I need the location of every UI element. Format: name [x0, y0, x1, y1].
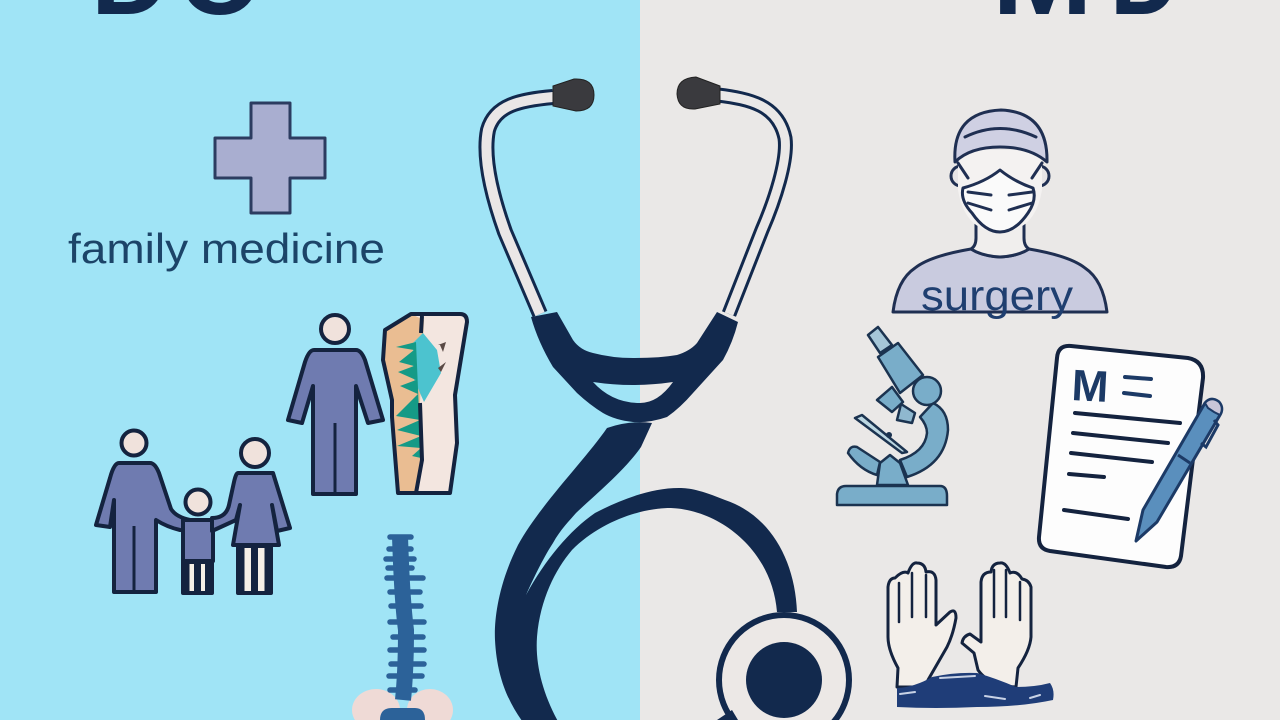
left binaural tube [486, 97, 553, 314]
label: surgery: surgery [921, 272, 1074, 320]
icon: microscope [837, 327, 948, 505]
shirt [893, 249, 1107, 312]
icon: stethoscope [486, 77, 849, 720]
icon: medical document with pen [1039, 346, 1222, 567]
heading: MD [992, 0, 1179, 38]
right glove [962, 563, 1031, 687]
face [958, 150, 1042, 232]
icon: gloved hands [888, 563, 1054, 708]
document header: M [1070, 361, 1110, 412]
panel: MD background [640, 0, 1280, 720]
left ear tip [553, 79, 594, 111]
mother [212, 439, 290, 593]
ears [951, 166, 971, 186]
icon: spine anatomy body [383, 314, 467, 493]
right binaural tube [718, 95, 785, 314]
icon: surgeon [893, 110, 1107, 312]
mask [962, 170, 1034, 232]
chest tube and arch [495, 422, 797, 720]
icon: family group [96, 430, 290, 593]
pen [1136, 399, 1222, 541]
icon: spine and pelvis [352, 536, 453, 720]
cap [955, 110, 1047, 162]
chest piece [719, 615, 849, 720]
label: family medicine: family medicine [68, 225, 385, 272]
right ear tip [677, 77, 720, 109]
child [183, 490, 213, 593]
icon: medical cross [215, 103, 325, 213]
father [96, 430, 200, 592]
yoke [531, 312, 738, 422]
document lines [1064, 413, 1180, 519]
left glove [888, 563, 956, 687]
panel: DO background [0, 0, 640, 720]
cuff [897, 673, 1054, 708]
icon: adult patient [288, 315, 383, 494]
